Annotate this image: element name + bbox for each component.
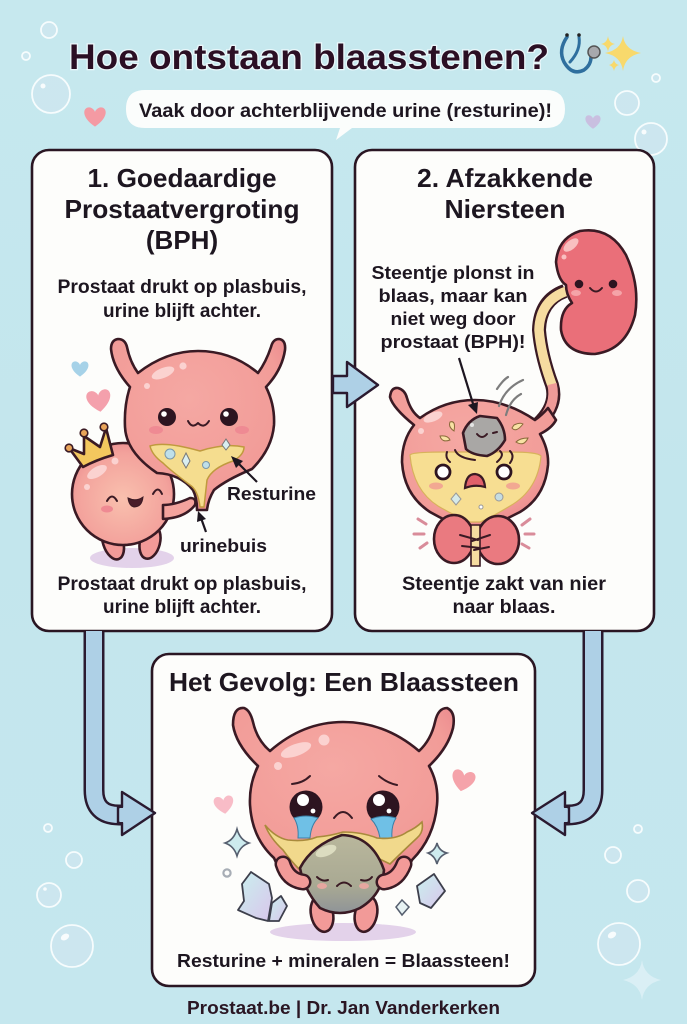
title: Hoe ontstaan blaasstenen?: [69, 38, 549, 77]
panel 1 heading: (BPH): [146, 225, 218, 255]
panel 1 heading: [64, 163, 300, 255]
subtitle speech bubble: Vaak door achterblijvende urine (resturine)!: [139, 101, 552, 122]
panel 1 heading: Prostaatvergroting: [64, 194, 300, 224]
residual urine: [150, 444, 244, 507]
label: Resturine: [227, 456, 316, 504]
illustration: enlarged prostate lobes: [414, 515, 534, 566]
sad face: [292, 776, 397, 785]
crown: [65, 423, 113, 467]
ureter: [538, 291, 567, 424]
callout text: blaas, maar kan: [378, 286, 528, 306]
subtitle speech bubble: [126, 90, 565, 140]
panel 2 heading: 2. Afzakkende: [417, 163, 593, 193]
panel 3 heading: Het Gevolg: Een Blaassteen: [169, 667, 519, 697]
callout text: Steentje plonst in: [372, 263, 534, 283]
hearts: [72, 361, 112, 413]
panel 1 caption: Prostaat drukt op plasbuis,: [58, 574, 306, 595]
illustration: bladder with residual urine: [111, 339, 285, 519]
hearts top: [84, 107, 601, 129]
label: urinebuis: urinebuis: [180, 536, 267, 556]
panel 2 heading: [417, 163, 593, 224]
label: Resturine: Resturine: [227, 484, 316, 504]
arrow: label to stone: [459, 358, 478, 414]
illustration: sad bladder holding stone: [233, 708, 454, 941]
callout text: prostaat (BPH)!: [380, 332, 526, 352]
panel 2 caption: Steentje zakt van nier: [402, 574, 607, 595]
callout text: [372, 263, 534, 352]
sparkles, hearts and crystals: [213, 768, 477, 921]
illustration: prostate with crown: [65, 423, 174, 568]
icon: sparkles: [601, 36, 641, 71]
arrow: left panel down to result: [94, 631, 155, 835]
arrow: right panel down to result: [532, 631, 593, 835]
icon: stethoscope: [562, 33, 600, 72]
callout text: niet weg door: [390, 309, 516, 329]
motion lines: [497, 377, 523, 415]
panel 1 intro text: urine blijft achter.: [103, 301, 261, 322]
illustration: kidney: [556, 230, 636, 354]
panel 1 intro text: [58, 277, 306, 322]
panel 2 heading: Niersteen: [444, 194, 566, 224]
label: urinebuis: [180, 511, 267, 556]
prostate arm: [163, 498, 195, 519]
panel 1 intro text: Prostaat drukt op plasbuis,: [58, 277, 306, 298]
arrow: panel 1 to panel 2: [333, 362, 378, 407]
panel: result: [152, 654, 535, 986]
footer: Prostaat.be | Dr. Jan Vanderkerken: [187, 998, 500, 1018]
illustration: bladder with stone splash: [390, 377, 556, 530]
panel: 1 BPH: [32, 150, 332, 631]
panel 1 heading: 1. Goedaardige: [88, 163, 276, 193]
panel 1 caption: [58, 574, 306, 618]
bladder face: [158, 408, 176, 426]
panel 1 caption: urine blijft achter.: [103, 597, 261, 618]
urine band: [265, 822, 422, 870]
panel: 2 kidney stone: [355, 150, 654, 631]
stone: [463, 416, 505, 456]
panel 3 caption: Resturine + mineralen = Blaassteen!: [177, 951, 510, 971]
panel 2 caption: naar blaas.: [452, 597, 556, 618]
stone: [300, 835, 384, 913]
panel 2 caption: [402, 574, 607, 618]
arms: [283, 864, 404, 882]
